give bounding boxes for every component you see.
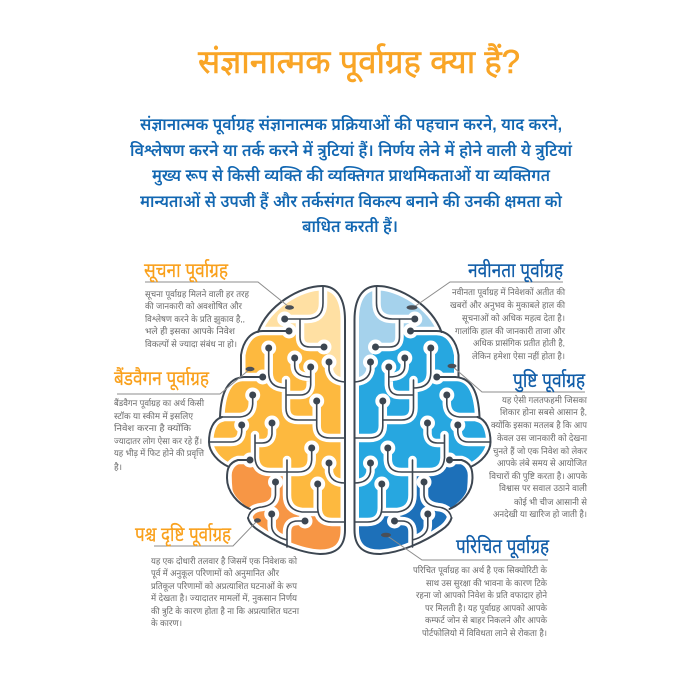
leader line bbox=[406, 282, 563, 310]
heading: परिचित पूर्वाग्रह bbox=[456, 534, 549, 559]
text block: प्रतिकूल परिणामों को अप्रत्याशित घटनाओं के रूप bbox=[151, 580, 298, 592]
intro paragraph: संज्ञानात्मक पूर्वाग्रह संज्ञानात्मक प्रक्रियाओं की पहचान करने, याद करने, bbox=[140, 114, 562, 136]
text block: गालांकि हाल की जानकारी ताजा और bbox=[455, 325, 565, 336]
callout: बैंडवैगन पूर्वाग्रह bbox=[114, 365, 254, 472]
text block: पोर्टफोलियो में विविधता लाने से रोकता है। bbox=[422, 627, 547, 638]
text block: परिचित पूर्वाग्रह का अर्थ है एक सिक्योरिटी के bbox=[413, 564, 547, 576]
text block: की जानकारी को अवशोषित और bbox=[145, 300, 242, 311]
text block: पर मिलती है। यह पूर्वाग्रह आपको आपके bbox=[425, 602, 547, 614]
right brain outline bbox=[354, 286, 490, 554]
text block: खबरों और अनुभव के मुकाबले हाल की bbox=[450, 299, 566, 311]
text block: केवल उस जानकारी को देखना bbox=[497, 432, 588, 443]
left brain dot halos bbox=[234, 312, 336, 528]
leader line bbox=[154, 518, 261, 546]
text block: यह ऐसी गलतफहमी जिसका bbox=[502, 394, 588, 405]
left brain pale top zone bbox=[258, 286, 345, 383]
text block: पूर्व में अनुकूल परिणामों को अनुमानित और bbox=[151, 567, 279, 579]
callout: परिचित पूर्वाग्रह bbox=[381, 533, 549, 638]
left brain dots bbox=[238, 316, 332, 524]
text block: विकल्पों से ज्यादा संबंध ना हो। bbox=[145, 338, 237, 349]
text block: विश्लेषण करने के प्रति झुकाव है,, bbox=[145, 313, 245, 325]
brain: right hemisphere bbox=[354, 286, 490, 554]
heading: पुष्टि पूर्वाग्रह bbox=[513, 368, 585, 393]
heading: बैंडवैगन पूर्वाग्रह bbox=[114, 365, 209, 391]
callout: नवीनता पूर्वाग्रह bbox=[406, 258, 566, 361]
text block: के कारण। bbox=[151, 617, 182, 628]
text block bbox=[450, 286, 566, 361]
heading: पश्च दृष्टि पूर्वाग्रह bbox=[135, 522, 231, 547]
callout: पुष्टि पूर्वाग्रह bbox=[448, 364, 588, 519]
right brain circuit lines bbox=[354, 286, 490, 547]
text block: में देखता है। ज्यादातर मामलों में, नुकसान निर्णय bbox=[151, 592, 298, 604]
left brain outline bbox=[209, 286, 345, 554]
callout: सूचना पूर्वाग्रह bbox=[144, 259, 294, 349]
intro paragraph bbox=[130, 114, 573, 236]
text block: ज्यादातर लोग ऐसा कर रहे हैं। bbox=[114, 435, 202, 446]
text block: सूचना पूर्वाग्रह मिलने वाली हर तरह bbox=[145, 288, 249, 300]
right brain white channels bbox=[354, 286, 490, 547]
intro paragraph: मुख्य रूप से किसी व्यक्ति की व्यक्तिगत प्राथमिकताओं या व्यक्तिगत bbox=[152, 165, 551, 187]
text block: बैंडवैगन पूर्वाग्रह का अर्थ किसी bbox=[114, 397, 205, 409]
text block: यह भीड़ में फिट होने की प्रवृत्ति bbox=[114, 447, 205, 459]
intro paragraph: विश्लेषण करने या तर्क करने में त्रुटियां हैं। निर्णय लेने में होने वाली ये त्रुटियां bbox=[130, 140, 573, 162]
left brain base colour bbox=[209, 286, 345, 554]
text block: निवेश करना है क्योंकि bbox=[114, 422, 191, 433]
text block: विश्वास पर सवाल उठाने वाली bbox=[499, 482, 588, 493]
text block: शिकार होना सबसे आसान है, bbox=[500, 406, 587, 417]
text block: भले ही इसका आपके निवेश bbox=[145, 325, 236, 336]
text block: आपके लंबे समय से आयोजित bbox=[497, 457, 588, 468]
text block bbox=[413, 564, 547, 638]
intro paragraph: बाधित करती हैं। bbox=[302, 216, 398, 236]
text block: है। bbox=[114, 461, 122, 472]
callout: पश्च दृष्टि पूर्वाग्रह bbox=[135, 518, 300, 628]
text block: अनदेखी या खारिज हो जाती है। bbox=[493, 508, 587, 519]
title: संज्ञानात्मक पूर्वाग्रह क्या हैं? bbox=[198, 43, 520, 82]
text block: चुनते हैं जो एक निवेश को लेकर bbox=[493, 445, 587, 457]
leader line bbox=[117, 367, 254, 394]
text block: विचारों की पुष्टि करता है। आपके bbox=[489, 470, 587, 482]
text block: की त्रुटि के कारण होता है ना कि अप्रत्याशित घटना bbox=[151, 605, 300, 617]
intro paragraph: मान्यताओं से उपजी हैं और तर्कसंगत विकल्प बनाने की उनकी क्षमता को bbox=[140, 191, 563, 211]
text block: लेकिन हमेशा ऐसा नहीं होता है। bbox=[472, 350, 565, 361]
leader line bbox=[145, 282, 294, 310]
text block: स्टॉक या स्कीम में इसलिए bbox=[114, 410, 193, 421]
text block: कम्फर्ट जोन से बाहर निकलने और आपके bbox=[425, 614, 547, 625]
right brain pale top zone bbox=[354, 286, 442, 383]
left brain dark bottom zone bbox=[227, 460, 345, 554]
text block bbox=[114, 397, 205, 472]
right brain dots bbox=[367, 316, 461, 524]
text block: यह एक दोधारी तलवार है जिसमें एक निवेशक को bbox=[151, 555, 298, 566]
text block bbox=[489, 394, 588, 519]
heading: सूचना पूर्वाग्रह bbox=[144, 259, 228, 283]
text block: कोई भी चीज आसानी से bbox=[514, 496, 587, 507]
left brain white channels bbox=[209, 286, 345, 547]
heading: नवीनता पूर्वाग्रह bbox=[468, 258, 563, 283]
text block: अधिक प्रासंगिक प्रतीत होती है, bbox=[473, 337, 565, 348]
leader line bbox=[381, 533, 548, 560]
text block: रहना जो आपको निवेश के प्रति वफादार होने bbox=[416, 589, 547, 600]
right brain base colour bbox=[354, 286, 490, 554]
text block bbox=[151, 555, 300, 628]
text block bbox=[145, 288, 249, 349]
left brain circuit lines bbox=[209, 286, 345, 547]
right brain dark bottom zone bbox=[354, 460, 472, 554]
brain: left hemisphere bbox=[209, 286, 345, 554]
leader line bbox=[448, 364, 585, 392]
text block: साथ उस सुरक्षा की भावना के कारण टिके bbox=[426, 577, 547, 589]
text block: क्योंकि इसका मतलब है कि आप bbox=[491, 419, 588, 430]
right brain dot halos bbox=[363, 312, 465, 528]
text block: सूचनाओं को अधिक महत्व देता है। bbox=[462, 312, 565, 324]
text block: नवीनता पूर्वाग्रह में निवेशकों अतीत की bbox=[452, 286, 566, 298]
